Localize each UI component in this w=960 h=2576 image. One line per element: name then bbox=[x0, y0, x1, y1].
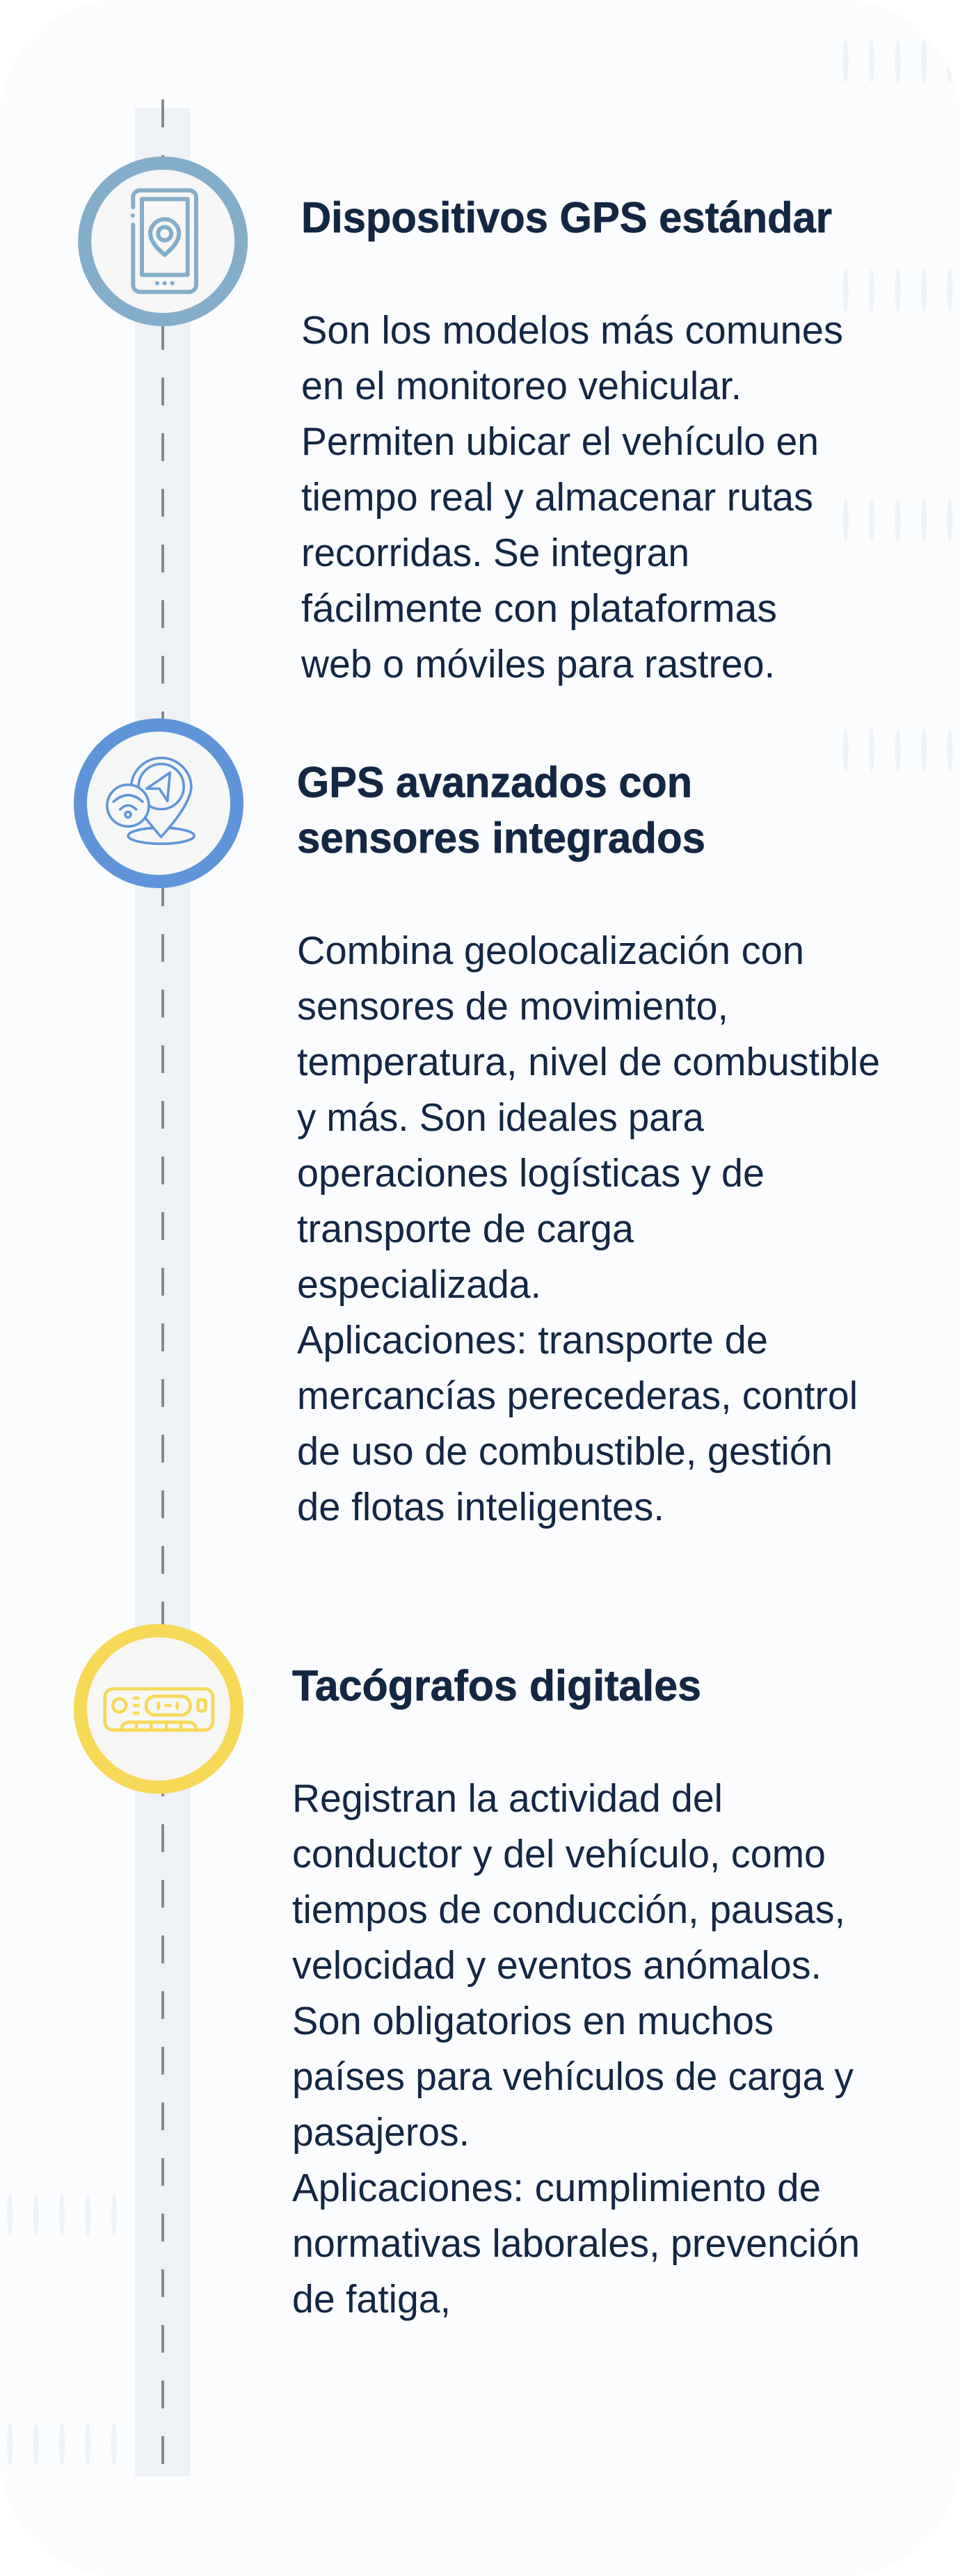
text block: advanced GPS description: transporte de carga bbox=[297, 1207, 634, 1251]
icon: digital tachograph bbox=[81, 1631, 237, 1787]
text block: tachograph description: países para vehículos de carga y bbox=[292, 2054, 854, 2099]
text block: standard GPS description: fácilmente con plataformas bbox=[301, 586, 777, 631]
text block: tachograph description: conductor y del vehículo, como bbox=[292, 1832, 826, 1876]
text block: advanced GPS description bbox=[297, 928, 880, 1529]
heading: Dispositivos GPS estándar: Dispositivos GPS estándar bbox=[301, 194, 832, 242]
heading: GPS avanzados con sensores integrados bbox=[297, 759, 705, 862]
text block: standard GPS description: recorridas. Se integran bbox=[301, 531, 689, 575]
icon: map pin with navigation arrow and wifi bbox=[81, 725, 237, 882]
text block: standard GPS description: en el monitoreo vehicular. bbox=[301, 364, 742, 408]
heading: GPS avanzados con sensores integrados: GPS avanzados con bbox=[297, 759, 692, 807]
text block: advanced GPS description: especializada. bbox=[297, 1262, 541, 1307]
text block: tachograph description: Son obligatorios en muchos bbox=[292, 1999, 774, 2043]
text block: standard GPS description: Son los modelos más comunes bbox=[301, 308, 843, 353]
road: vertical timeline band bbox=[135, 99, 191, 2477]
text block: advanced GPS description: Aplicaciones: transporte de bbox=[297, 1318, 768, 1362]
text block: advanced GPS description: operaciones logísticas y de bbox=[297, 1151, 765, 1196]
text block: tachograph description: tiempos de conducción, pausas, bbox=[292, 1887, 845, 1932]
text block: standard GPS description bbox=[301, 308, 843, 686]
text block: advanced GPS description: Combina geolocalización con bbox=[297, 928, 804, 973]
text block: tachograph description: pasajeros. bbox=[292, 2110, 470, 2155]
heading: Tacógrafos digitales: Tacógrafos digitales bbox=[292, 1662, 701, 1710]
text block: tachograph description: Registran la actividad del bbox=[292, 1776, 723, 1821]
text block: advanced GPS description: mercancías perecederas, control bbox=[297, 1374, 858, 1418]
text block: advanced GPS description: sensores de movimiento, bbox=[297, 984, 728, 1029]
text block: advanced GPS description: de flotas inteligentes. bbox=[297, 1485, 664, 1529]
icon: phone with location pin bbox=[85, 163, 241, 320]
text block: standard GPS description: web o móviles para rastreo. bbox=[301, 642, 775, 686]
text block: tachograph description bbox=[292, 1776, 860, 2321]
text block: tachograph description: normativas laborales, prevención bbox=[292, 2221, 860, 2266]
text block: tachograph description: Aplicaciones: cumplimiento de bbox=[292, 2166, 821, 2210]
text block: standard GPS description: tiempo real y almacenar rutas bbox=[301, 475, 813, 520]
text block: advanced GPS description: de uso de combustible, gestión bbox=[297, 1429, 833, 1474]
text block: advanced GPS description: y más. Son ideales para bbox=[297, 1095, 704, 1140]
text block: tachograph description: de fatiga, bbox=[292, 2277, 451, 2321]
text block: advanced GPS description: temperatura, nivel de combustible bbox=[297, 1040, 880, 1084]
heading: GPS avanzados con sensores integrados: sensores integrados bbox=[297, 814, 705, 862]
text block: standard GPS description: Permiten ubicar el vehículo en bbox=[301, 419, 819, 464]
text block: tachograph description: velocidad y eventos anómalos. bbox=[292, 1943, 822, 1988]
